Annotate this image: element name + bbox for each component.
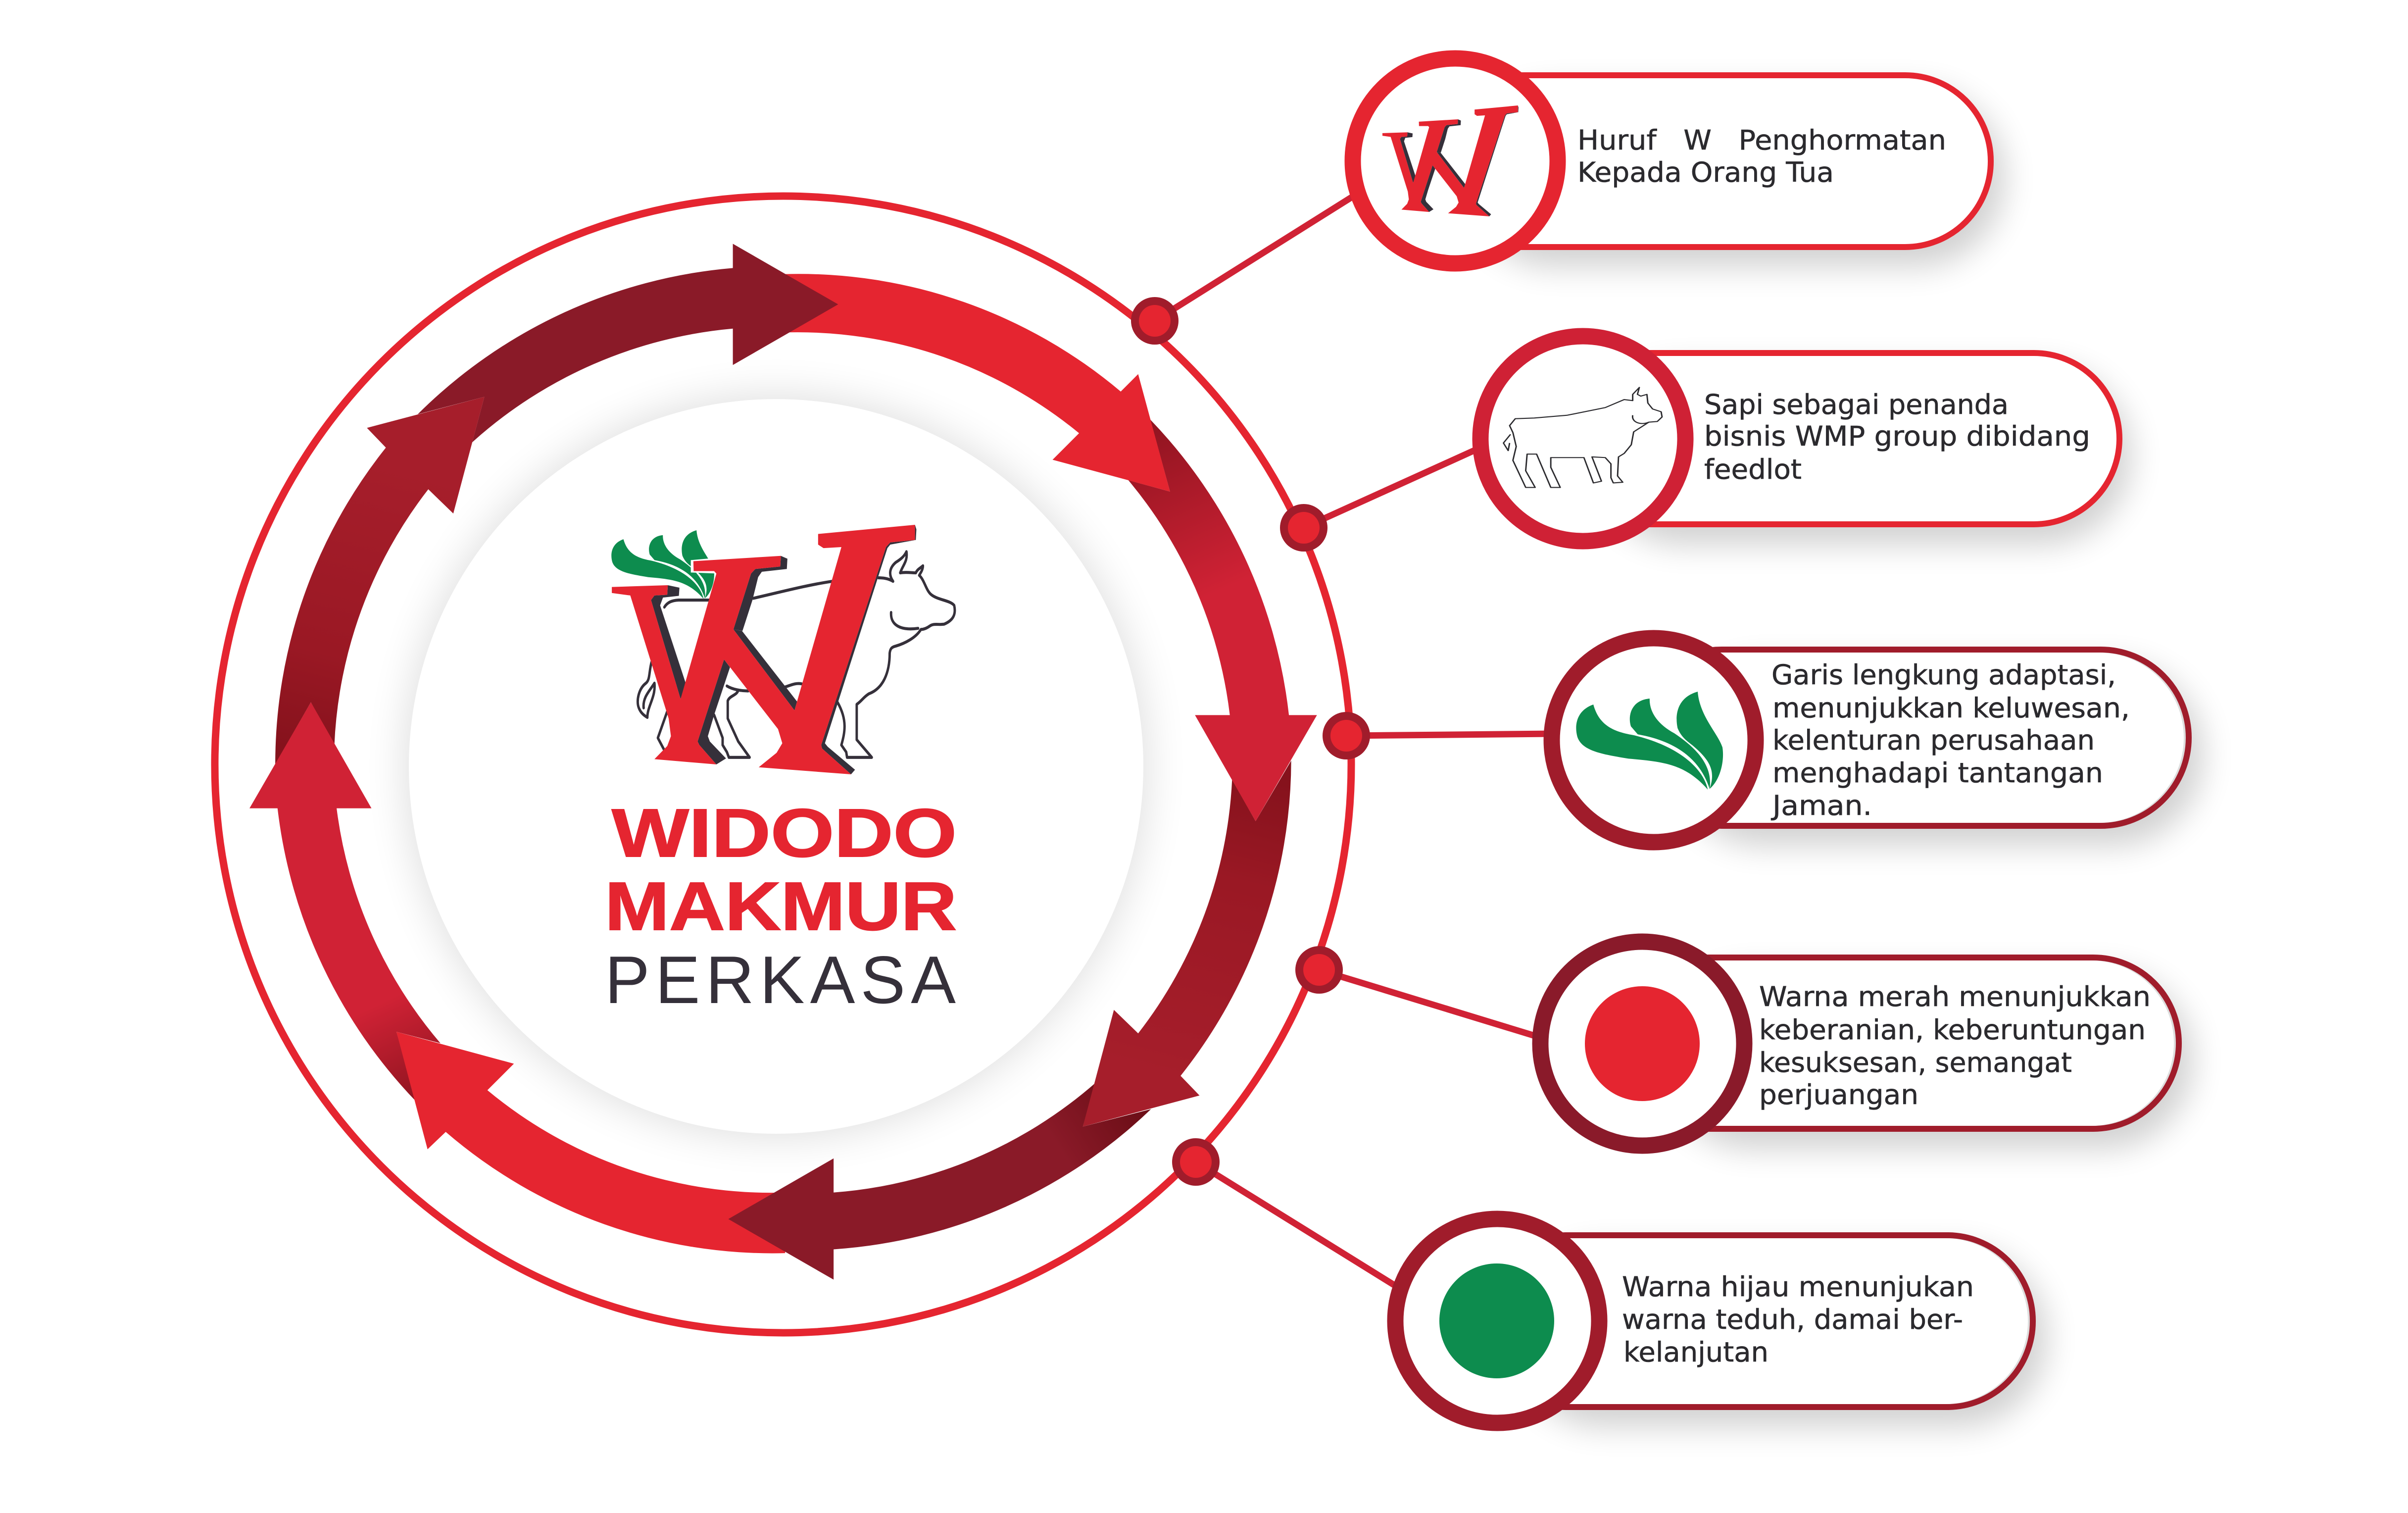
pill xyxy=(1633,650,2189,826)
panel text xyxy=(1577,124,1946,188)
connector lines and outer ring xyxy=(215,188,1554,1333)
pill inner white xyxy=(1623,960,2174,1126)
panel text: keberanian, keberuntungan xyxy=(1759,1014,2146,1046)
logo text: MAKMUR: MAKMUR xyxy=(605,868,957,945)
logo leaf white border xyxy=(691,557,718,573)
icon ring xyxy=(1552,638,1756,842)
panel text: Warna merah menunjukkan xyxy=(1759,981,2151,1012)
pill shadow xyxy=(1465,89,2005,267)
pill shadow xyxy=(1673,663,2203,846)
pill shadow xyxy=(1594,367,2131,545)
panel text: Warna hijau menunjukan xyxy=(1622,1271,1974,1303)
arrow 5 lower right to bottom xyxy=(728,1083,1151,1280)
connector nodes on outer ring xyxy=(1131,297,1370,1186)
panel text: kelenturan perusahaan xyxy=(1772,724,2095,756)
icon: red dot xyxy=(1585,986,1700,1101)
central logo xyxy=(605,525,957,1017)
panel text: kelanjutan xyxy=(1623,1336,1769,1368)
arrow 7 lower left to left xyxy=(249,702,441,1102)
icon: green dot xyxy=(1439,1263,1554,1378)
arrow 2 top to upper right xyxy=(785,274,1170,492)
central white disc with soft shadow xyxy=(406,396,1146,1137)
node 3 xyxy=(1323,712,1370,759)
arrow 1 upper left to top xyxy=(418,244,838,442)
panel text: Garis lengkung adaptasi, xyxy=(1771,659,2116,691)
panel text xyxy=(1759,981,2151,1110)
icon ring xyxy=(1353,58,1558,263)
icon: cow outline xyxy=(1503,388,1662,488)
cycle of eight arrows xyxy=(249,244,1317,1280)
connector: green panel xyxy=(1196,1162,1406,1292)
panel text: perjuangan xyxy=(1759,1079,1918,1110)
logo text: WIDODO: WIDODO xyxy=(612,795,957,871)
panel text: Jaman. xyxy=(1771,790,1872,821)
panel 1: letter W xyxy=(1353,58,2005,267)
connector: W panel xyxy=(1155,188,1366,321)
panel 4: red colour xyxy=(1540,942,2193,1149)
connector: red panel xyxy=(1319,970,1544,1039)
pill xyxy=(1564,353,2119,524)
node 5 xyxy=(1172,1138,1220,1186)
panel text: Kepada Orang Tua xyxy=(1577,156,1834,188)
arrow 3 upper right to right xyxy=(1129,419,1317,821)
logo W monogram xyxy=(612,525,916,774)
arrow 4 right to lower right xyxy=(1083,760,1291,1126)
logo cow outline xyxy=(638,552,955,757)
pill xyxy=(1623,958,2179,1129)
icon ring xyxy=(1540,942,1744,1146)
panel text: warna teduh, damai ber- xyxy=(1622,1304,1963,1335)
pill xyxy=(1435,75,1991,247)
icon ring xyxy=(1395,1219,1599,1423)
pill shadow xyxy=(1515,1249,2047,1427)
panel text xyxy=(1771,659,2130,821)
icon ring xyxy=(1480,336,1685,541)
panel text: Sapi sebagai penanda xyxy=(1704,389,2009,420)
panel text: menghadapi tantangan xyxy=(1772,757,2103,789)
panel text: kesuksesan, semangat xyxy=(1759,1047,2072,1078)
arrow 8 left to upper left xyxy=(275,397,485,764)
panel text xyxy=(1704,389,2090,485)
node 2 xyxy=(1280,504,1327,552)
pill inner white xyxy=(1480,1238,2028,1404)
arrow 6 bottom to lower left xyxy=(396,1032,785,1253)
panel text xyxy=(1622,1271,1974,1368)
connector: curve panel xyxy=(1346,734,1554,736)
icon: W monogram xyxy=(1382,105,1519,216)
panel text: bisnis WMP group dibidang xyxy=(1704,420,2090,452)
node 4 xyxy=(1295,946,1343,994)
panel 2: cow xyxy=(1480,336,2131,545)
connector: cow panel xyxy=(1304,446,1485,528)
pill inner white xyxy=(1633,653,2184,823)
panel text: menunjukkan keluwesan, xyxy=(1772,692,2130,724)
outer ring circle xyxy=(215,196,1351,1333)
pill xyxy=(1480,1235,2033,1407)
panel text: Huruf W Penghormatan xyxy=(1577,124,1946,156)
pill shadow xyxy=(1663,971,2193,1149)
logo text: PERKASA: PERKASA xyxy=(605,942,956,1017)
panel 3: curved lines xyxy=(1552,638,2203,846)
logo leaves xyxy=(611,530,714,599)
panel text: feedlot xyxy=(1704,454,1802,485)
icon: green curved leaves xyxy=(1576,692,1723,790)
panel 5: green colour xyxy=(1395,1219,2047,1427)
node 1 xyxy=(1131,297,1179,345)
